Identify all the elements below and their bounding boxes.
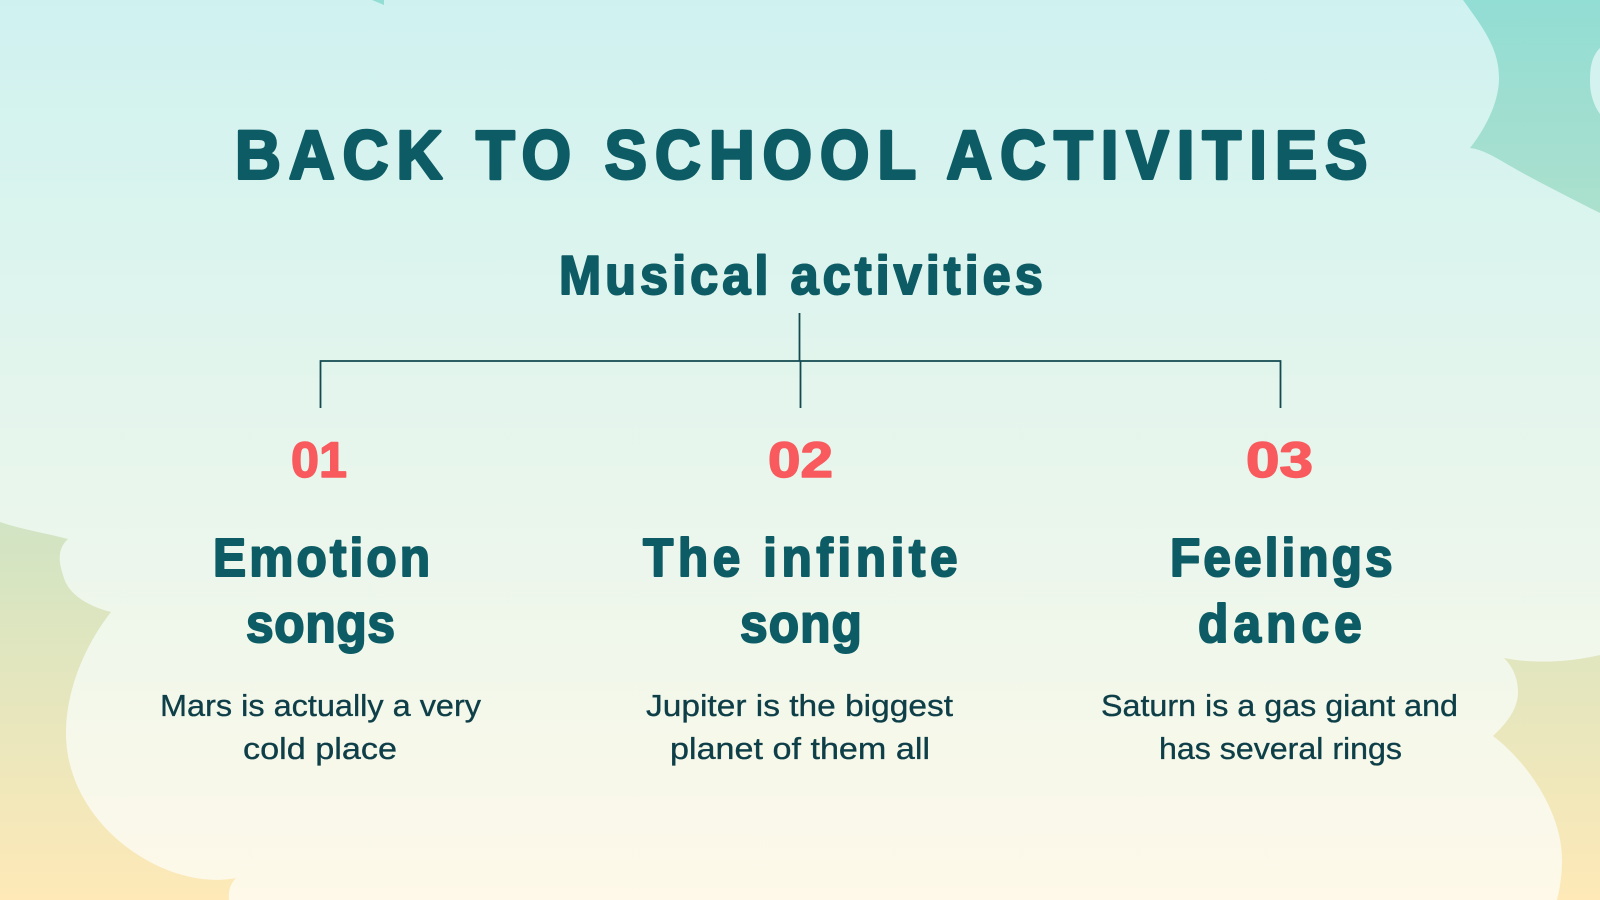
subtitle: musical activities: Musical activities: [559, 245, 1043, 306]
description: saturn: Saturn is a gas giant and: [1101, 688, 1458, 723]
title: BACK TO SCHOOL ACTIVITIES: [235, 117, 1368, 194]
heading: feelings dance: [1170, 527, 1393, 653]
heading: feelings dance: Feelings: [1170, 527, 1393, 587]
description: jupiter: [646, 688, 953, 766]
number 03: 03: [1246, 432, 1313, 488]
column 3: feelings dance: [1101, 432, 1458, 766]
number 02: 02: [768, 432, 833, 488]
heading: emotion songs: [213, 527, 430, 653]
number 01: 01: [291, 432, 347, 488]
heading: emotion songs: Emotion: [213, 527, 430, 587]
heading: the infinite song: [643, 527, 958, 653]
heading: the infinite song: The infinite: [643, 527, 958, 587]
description: saturn: [1101, 688, 1458, 766]
heading: emotion songs: songs: [246, 593, 395, 653]
description: saturn: has several rings: [1159, 731, 1402, 766]
description: mars: cold place: [243, 731, 397, 766]
description: mars: Mars is actually a very: [160, 688, 482, 723]
description: mars: [160, 688, 482, 766]
decorative cloud edge, top right: [1590, 48, 1600, 114]
column 1: emotion songs: [160, 432, 482, 766]
tree connector lines: [320, 313, 1280, 408]
description: jupiter: planet of them all: [670, 731, 930, 766]
heading: the infinite song: song: [740, 593, 862, 653]
description: jupiter: Jupiter is the biggest: [646, 688, 953, 723]
heading: feelings dance: dance: [1198, 593, 1362, 653]
column 2: the infinite song: [643, 432, 958, 766]
